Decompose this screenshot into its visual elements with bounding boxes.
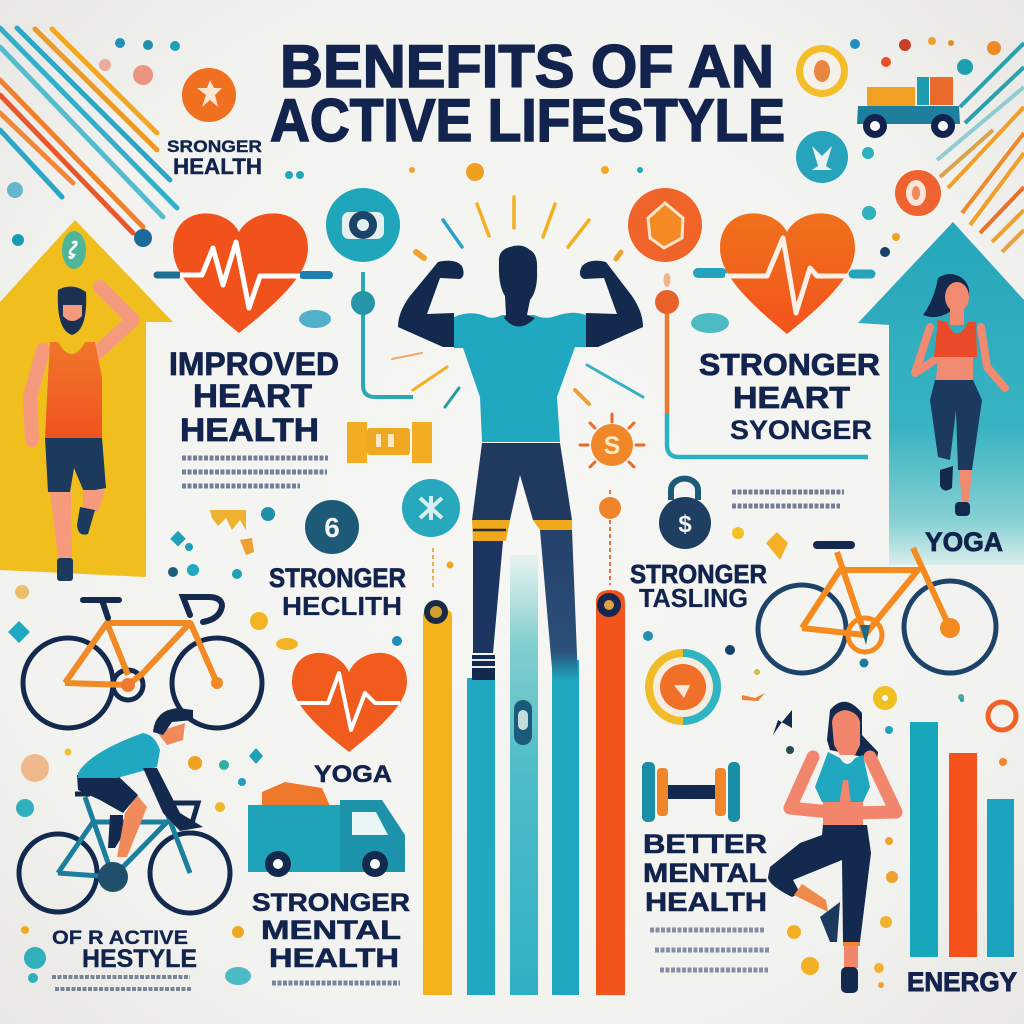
cyclist left	[19, 708, 230, 913]
heading: stronger heart syonger: SYONGER	[730, 415, 872, 445]
label: of active hestyle: OF R ACTIVE	[52, 928, 188, 949]
orange bicycle right	[758, 545, 996, 673]
title	[270, 33, 785, 154]
sun rays above athlete	[416, 197, 621, 259]
heart center	[292, 653, 407, 752]
central bars	[423, 555, 625, 995]
heading: improved heart health	[169, 346, 339, 448]
icon: delivery van	[248, 782, 405, 877]
bar chart right	[910, 722, 1014, 957]
icon: kettlebell	[659, 479, 711, 549]
label: stronger heclith	[269, 563, 406, 621]
orange bicycle left	[23, 597, 262, 728]
heading: stronger mental health: STRONGER	[252, 889, 410, 917]
sun icon	[433, 414, 644, 590]
label: stronger heclith: STRONGER	[269, 563, 406, 593]
icon: yellow dumbbell	[347, 422, 432, 463]
connector left	[351, 272, 413, 397]
label: of active hestyle	[52, 928, 197, 973]
title: BENEFITS OF AN	[280, 33, 774, 100]
heading: better mental health: HEALTH	[645, 887, 767, 917]
icon: top right badges	[796, 45, 941, 216]
heading: stronger mental health: HEALTH	[269, 943, 399, 973]
ring icon right	[988, 702, 1016, 730]
small text block left	[182, 458, 328, 486]
sun icon: S	[604, 432, 620, 460]
heading: stronger heart syonger	[699, 347, 880, 445]
label: stronger tasling: STRONGER	[630, 559, 767, 589]
icon: kettlebell: $	[678, 511, 692, 538]
title: ACTIVE LIFESTYLE	[270, 87, 785, 154]
badges center left: 6	[324, 512, 340, 543]
decoration: top left stripes	[0, 28, 177, 233]
icon: dumbbell	[642, 762, 740, 822]
small text block center	[272, 980, 400, 986]
heading: stronger heart syonger: STRONGER	[699, 347, 880, 382]
heart left	[157, 213, 329, 333]
label: stronger tasling	[630, 559, 767, 613]
label: stronger health top	[167, 137, 262, 179]
decoration: top right stripes	[937, 43, 1024, 252]
label: stronger heclith: HECLITH	[282, 591, 402, 621]
heart right	[698, 213, 871, 334]
yoga woman	[768, 702, 896, 993]
heading: stronger mental health	[252, 889, 410, 973]
icon: truck top right	[857, 77, 960, 138]
badge: center right	[645, 649, 721, 725]
icon: orange medal	[182, 68, 236, 122]
label: stronger health top: HEALTH	[173, 154, 262, 179]
yellow arrow with runner	[0, 220, 173, 581]
heading: improved heart health: HEART	[193, 378, 312, 414]
label: stronger tasling: TASLING	[639, 583, 748, 613]
label: energy: ENERGY	[907, 967, 1017, 997]
heading: improved heart health: HEALTH	[180, 412, 319, 448]
badge: watch	[326, 188, 400, 262]
small text block bottom left	[52, 977, 192, 989]
label: stronger health top: SRONGER	[167, 137, 262, 156]
label: yoga top right: YOGA	[925, 527, 1003, 557]
teal arrow with runner	[858, 222, 1024, 565]
badges center left	[305, 479, 460, 554]
label: of active hestyle: HESTYLE	[82, 945, 197, 973]
small text block lower right	[650, 930, 770, 970]
label: yoga center: YOGA	[314, 761, 392, 788]
heading: better mental health: MENTAL	[643, 858, 767, 888]
heading: stronger mental health: MENTAL	[261, 915, 401, 945]
badge: top right center	[628, 188, 702, 262]
heading: better mental health: BETTER	[643, 829, 767, 859]
central athlete	[398, 246, 643, 680]
connector right	[655, 273, 868, 457]
heading: better mental health	[643, 829, 767, 917]
heading: improved heart health: IMPROVED	[169, 346, 339, 382]
heading: stronger heart syonger: HEART	[733, 380, 850, 415]
small text block right	[732, 492, 844, 506]
motion marks around athlete	[392, 353, 643, 407]
